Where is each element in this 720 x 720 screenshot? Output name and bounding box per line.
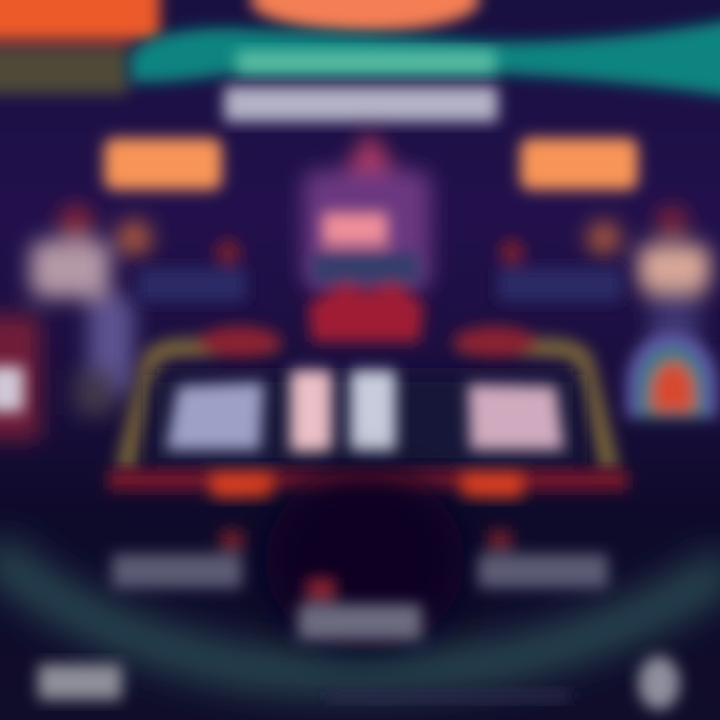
stage panel interior — [150, 375, 580, 465]
card: centre left — [290, 370, 332, 452]
footer: left logo — [38, 664, 122, 700]
bottom teal arc — [0, 550, 720, 673]
left figure — [0, 205, 152, 440]
title: second line — [224, 86, 498, 122]
header: top centre orange shape — [250, 0, 480, 32]
caption: centre with marker — [298, 578, 422, 640]
title: first line — [236, 50, 496, 74]
header: top left colour blocks — [0, 0, 160, 94]
right figure — [587, 207, 710, 340]
badge: left orange label — [104, 138, 222, 190]
stage frame: gold arch — [125, 326, 610, 470]
centre figure — [303, 130, 431, 290]
footer: centre strip — [330, 690, 570, 702]
badge: right orange label — [520, 138, 638, 190]
caption: left with marker — [112, 530, 244, 588]
stage base: red rail — [108, 470, 628, 498]
right dark blue label bar — [498, 239, 622, 302]
centre dark circle — [265, 470, 465, 650]
caption: right with marker — [478, 530, 608, 588]
centre figure detail — [308, 212, 424, 342]
card group: left — [166, 382, 264, 450]
header: teal ribbon — [130, 18, 720, 98]
card: centre right — [350, 370, 396, 452]
card group: right — [468, 384, 564, 450]
left dark blue label bar — [138, 239, 246, 302]
right rainbow arch icon — [626, 331, 718, 418]
footer: right icon — [638, 656, 680, 710]
left white card — [0, 366, 24, 412]
